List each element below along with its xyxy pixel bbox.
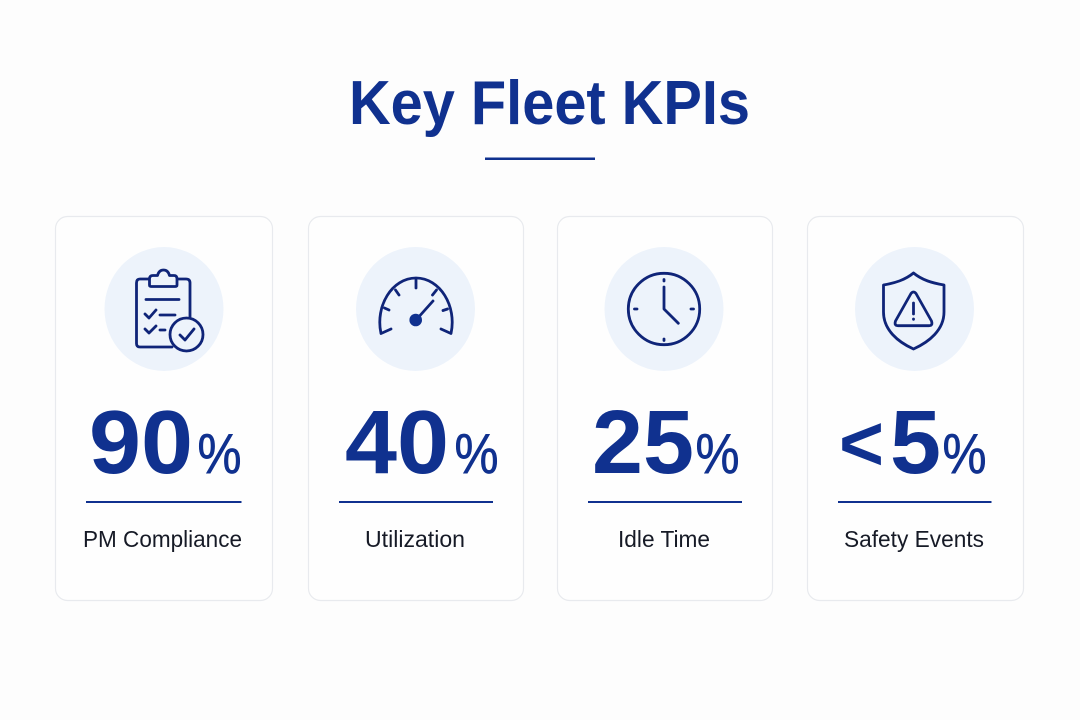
panel: PM Compliance [56, 216, 272, 600]
value: <5%: % [942, 422, 986, 486]
value: 90% [89, 393, 242, 493]
label: PM Compliance: PM Compliance [83, 526, 242, 552]
label: Utilization: Utilization [365, 526, 465, 552]
value: <5% [839, 393, 986, 493]
value: <5%: < [839, 399, 884, 487]
icon: clock [604, 247, 724, 371]
value: 25%: % [696, 422, 740, 486]
icon: shield with warning [855, 247, 974, 371]
panel: Safety Events [808, 216, 1024, 600]
label: Idle Time: Idle Time [618, 526, 710, 552]
label: Safety Events: Safety Events [844, 526, 984, 552]
value: 90%: 90 [89, 393, 193, 493]
icon: clipboard with check [104, 247, 224, 371]
value: 40%: 40 [345, 393, 449, 493]
title underline [485, 158, 595, 160]
value: 40% [345, 393, 498, 493]
value: 25% [592, 393, 740, 493]
value: 90%: % [198, 422, 242, 486]
value: <5%: 5 [890, 393, 941, 493]
panel: Utilization [308, 216, 524, 600]
title: Key Fleet KPIs [349, 69, 750, 138]
panel: Idle Time [558, 216, 772, 600]
value: 25%: 25 [592, 393, 694, 493]
value: 40%: % [454, 422, 498, 486]
icon: speedometer [356, 247, 475, 371]
